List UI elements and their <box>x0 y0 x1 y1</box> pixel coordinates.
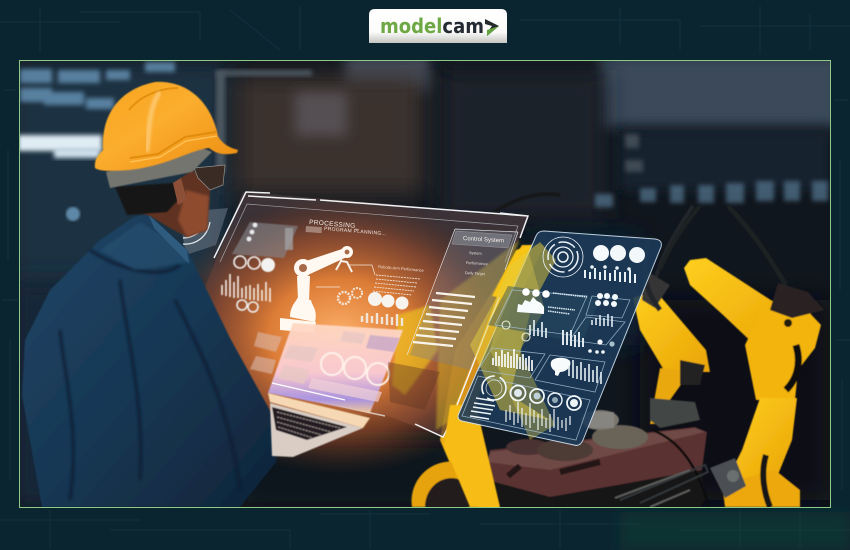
frame border <box>20 60 830 508</box>
holographic small disc left of panel <box>182 208 228 255</box>
worker <box>22 82 278 507</box>
face and neck <box>142 170 210 238</box>
holographic main panel <box>196 191 529 470</box>
left yellow robot arm <box>412 194 560 510</box>
control system panel: System <box>469 251 482 256</box>
control system panel: Daily Target <box>465 271 486 276</box>
goggles <box>194 165 225 190</box>
third row bars <box>493 349 532 371</box>
upper-left data cards <box>222 222 298 374</box>
hair <box>115 183 178 215</box>
laptop screen <box>268 323 440 413</box>
mid section charts <box>522 288 530 296</box>
holographic right panel <box>458 231 661 445</box>
laptop base and keyboard <box>268 393 370 457</box>
control system panel: Control System <box>463 236 504 244</box>
middle yellow robot arm <box>633 206 710 428</box>
right yellow robot arm <box>652 206 824 507</box>
control system panel <box>407 229 518 370</box>
robot arm pictogram <box>280 246 353 333</box>
window lights <box>20 62 175 109</box>
holographic main panel: PROGRAM PLANNING... <box>324 226 387 237</box>
helmet <box>95 82 238 171</box>
orange glow <box>196 204 500 470</box>
top gauge cluster <box>543 237 583 277</box>
robotic arm performance text: Robotic Arm Performance <box>378 264 425 273</box>
logo wordmark: modelcam <box>380 14 484 38</box>
yellow arm visible past the panel <box>444 244 536 507</box>
jacket folds <box>60 250 240 500</box>
control system panel: Performance <box>466 261 488 266</box>
helmet grey band <box>106 147 212 188</box>
logo chevron <box>485 19 499 36</box>
brain icon <box>551 358 570 376</box>
machine table <box>487 410 708 507</box>
logo badge <box>369 9 507 43</box>
gears <box>316 265 375 304</box>
panel border <box>214 192 528 437</box>
processing headings: PROCESSING_ <box>309 219 360 230</box>
bottom gauges and waveform <box>482 376 581 410</box>
jacket <box>22 214 278 507</box>
three gauges <box>368 292 382 306</box>
